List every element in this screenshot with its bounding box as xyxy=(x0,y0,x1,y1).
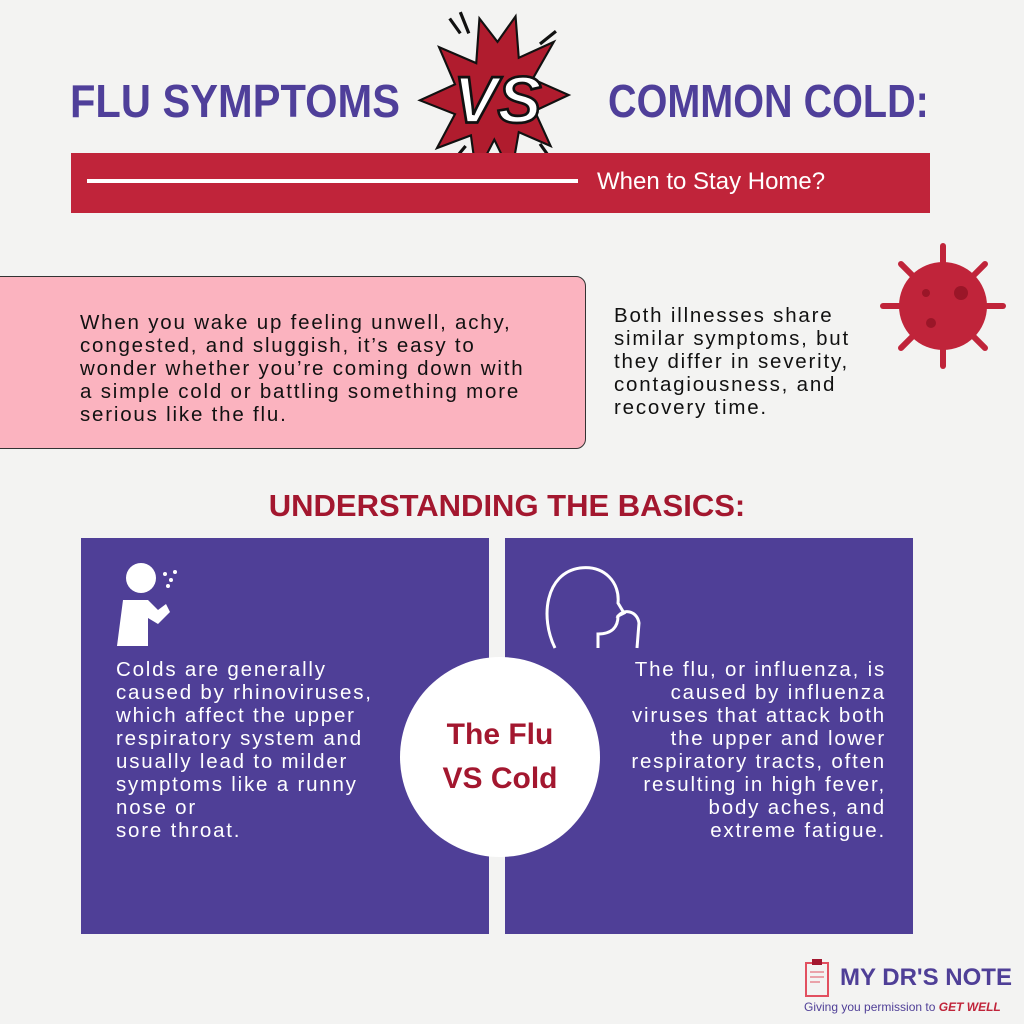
flu text: respiratory tracts, often xyxy=(631,750,886,773)
side text: similar symptoms, but xyxy=(614,327,850,350)
side text: they differ in severity, xyxy=(614,350,849,373)
title left: FLU SYMPTOMS xyxy=(70,75,400,127)
center circle: VS Cold xyxy=(442,762,558,795)
cold text xyxy=(116,658,373,842)
icon: coughing head xyxy=(546,566,640,649)
side text: contagiousness, and xyxy=(614,373,836,396)
title right: COMMON COLD: xyxy=(608,75,929,127)
banner: When to Stay Home? xyxy=(597,168,825,195)
flu text: caused by influenza xyxy=(671,681,886,704)
side text: recovery time. xyxy=(614,396,768,419)
icon: sneezing person xyxy=(117,563,177,646)
side text: Both illnesses share xyxy=(614,304,833,327)
flu text: resulting in high fever, xyxy=(643,773,886,796)
icon: virus xyxy=(880,243,1006,369)
cold text: which affect the upper xyxy=(116,704,356,727)
intro text box: When you wake up feeling unwell, achy, xyxy=(80,311,512,334)
panel: cold xyxy=(81,538,489,934)
icon: vs starburst: VS xyxy=(454,63,541,137)
flu text: extreme fatigue. xyxy=(710,819,886,842)
intro text box: serious like the flu. xyxy=(80,403,288,426)
logo xyxy=(804,959,1012,1014)
logo: MY DR'S NOTE xyxy=(840,964,1012,991)
flu text: body aches, and xyxy=(709,796,886,819)
intro text box: a simple cold or battling something more xyxy=(80,380,520,403)
side text xyxy=(614,304,850,419)
cold text: Colds are generally xyxy=(116,658,327,681)
cold text: respiratory system and xyxy=(116,727,363,750)
center circle: The Flu xyxy=(447,718,553,751)
cold text: sore throat. xyxy=(116,819,241,842)
icon: clipboard xyxy=(805,959,829,997)
flu text: The flu, or influenza, is xyxy=(635,658,886,681)
cold text: symptoms like a runny xyxy=(116,773,358,796)
cold text: usually lead to milder xyxy=(116,750,348,773)
icon: vs starburst xyxy=(417,12,572,153)
cold text: caused by rhinoviruses, xyxy=(116,681,373,704)
panel: flu xyxy=(505,538,913,934)
banner xyxy=(71,153,930,213)
section heading: UNDERSTANDING THE BASICS: xyxy=(269,488,745,523)
flu text xyxy=(631,658,886,842)
intro text box: congested, and sluggish, it’s easy to xyxy=(80,334,476,357)
logo: Giving you permission to GET WELL xyxy=(804,1000,1001,1014)
intro text box xyxy=(0,276,586,449)
center circle xyxy=(400,657,600,857)
cold text: nose or xyxy=(116,796,197,819)
flu text: the upper and lower xyxy=(671,727,886,750)
intro text box: wonder whether you’re coming down with xyxy=(80,357,524,380)
flu text: viruses that attack both xyxy=(632,704,886,727)
